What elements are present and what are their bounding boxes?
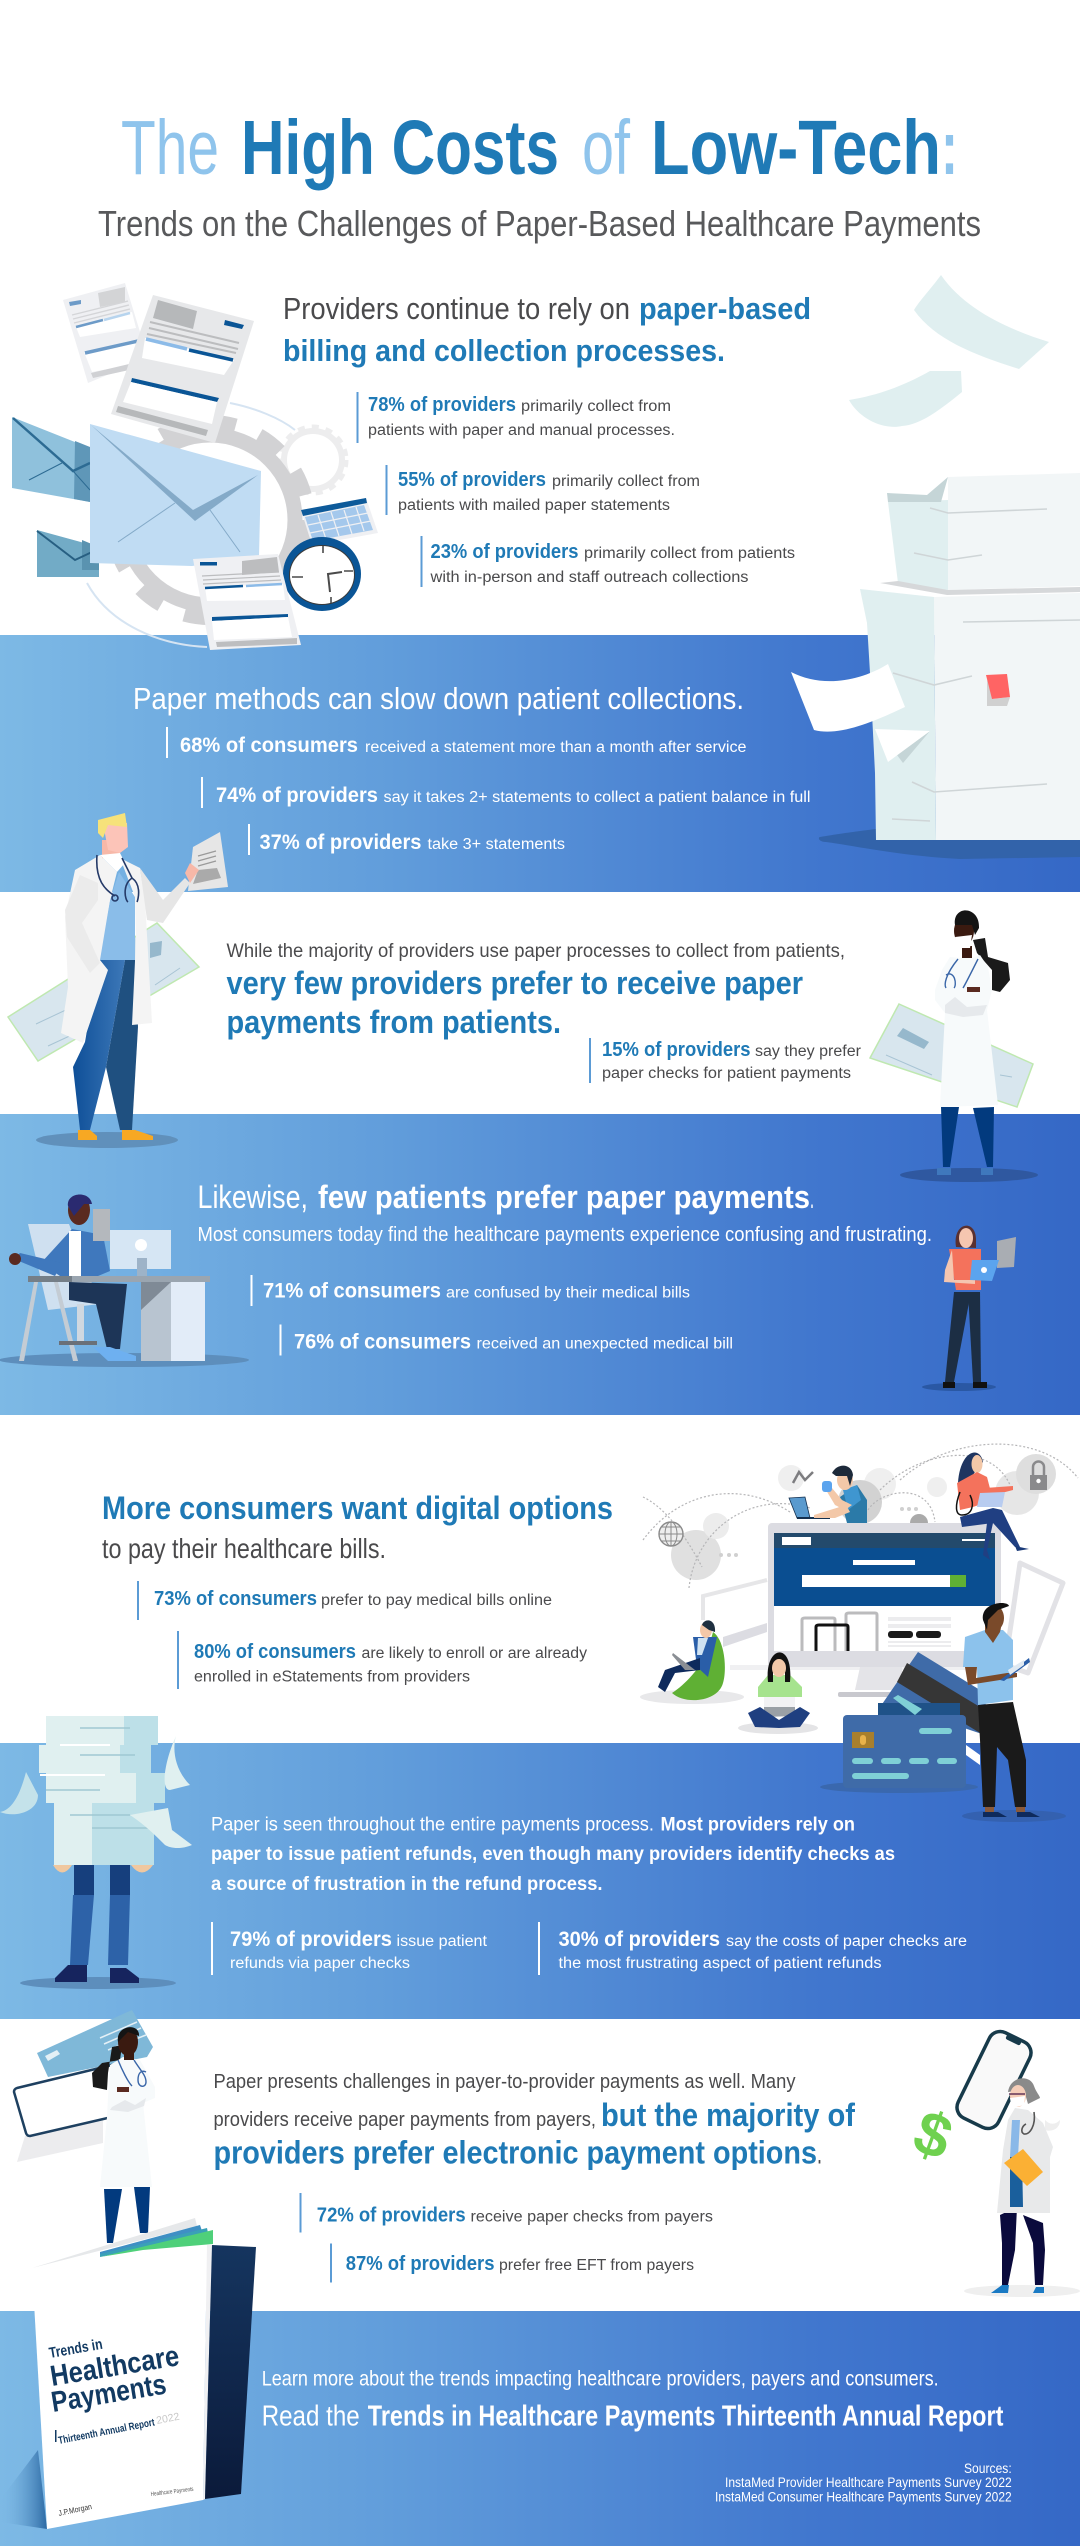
flying papers bbox=[849, 275, 1049, 427]
body text: but the majority of bbox=[601, 2097, 855, 2133]
illustration: digital payments scene bbox=[640, 1444, 1078, 1822]
stat: 72% of providers bbox=[300, 2193, 713, 2232]
blue band: paper methods bbox=[0, 635, 1080, 892]
stat: 55% of providers: 55% of providers bbox=[398, 469, 546, 491]
body text: a source of frustration in the refund process. bbox=[211, 1873, 602, 1895]
stat: 72% of providers: 72% of providers bbox=[317, 2204, 466, 2226]
stat: 23% of providers: 23% of providers bbox=[430, 541, 578, 563]
stat: 78% of providers: primarily collect from bbox=[521, 398, 671, 415]
heading: more consumers bbox=[102, 1490, 613, 1564]
stat: 72% of providers: receive paper checks from payers bbox=[470, 2208, 713, 2226]
blue band: learn more bbox=[0, 2311, 1080, 2546]
section: consumers want digital options bbox=[102, 1490, 613, 1689]
stat: 78% of providers: patients with paper and manual processes. bbox=[368, 422, 675, 439]
stat: 68% of consumers: received a statement more than a month after service bbox=[365, 739, 746, 756]
illustration: doctor with card and laptop bbox=[14, 2010, 155, 2243]
icon: padlock bbox=[1030, 1462, 1047, 1490]
icon: calendar bbox=[301, 498, 378, 545]
stat: 76% of consumers bbox=[280, 1324, 733, 1356]
section: few patients prefer paper: . bbox=[810, 1179, 814, 1215]
title: The bbox=[121, 105, 219, 191]
section: few providers prefer paper bbox=[226, 940, 861, 1083]
body text: providers receive paper payments from payers, bbox=[214, 2109, 596, 2131]
stat: 68% of consumers bbox=[166, 727, 746, 758]
stat: 71% of consumers bbox=[250, 1275, 690, 1306]
stat: 15% of providers: say they prefer bbox=[755, 1043, 861, 1060]
section: providers rely on paper bbox=[283, 291, 811, 587]
stat: 73% of consumers bbox=[137, 1581, 552, 1620]
body text: Paper presents challenges in payer-to-provider payments as well. Many bbox=[214, 2071, 796, 2093]
sources: Sources: bbox=[964, 2461, 1012, 2476]
sources bbox=[715, 2461, 1012, 2504]
icon: small envelope bbox=[37, 530, 99, 577]
stat: 30% of providers: the most frustrating aspect of patient refunds bbox=[558, 1955, 882, 1972]
book cover title bbox=[48, 2336, 181, 2447]
illustration: woman with laptop bbox=[922, 1226, 1016, 1391]
heading: very few providers: payments from patients. bbox=[226, 1004, 561, 1040]
stat: 55% of providers: primarily collect from bbox=[552, 473, 700, 490]
stat: 30% of providers: 30% of providers bbox=[558, 1928, 720, 1951]
sources: InstaMed Consumer Healthcare Payments Survey 2022 bbox=[715, 2490, 1012, 2504]
stat: 15% of providers: paper checks for patient payments bbox=[602, 1065, 851, 1082]
person: woman cross-legged bbox=[738, 1652, 818, 1734]
illustration: stack of paper bbox=[791, 275, 1080, 859]
icon: main envelope bbox=[90, 424, 261, 566]
icon: dots bbox=[719, 1507, 918, 1557]
heading: paper methods: Paper methods can slow down patient collections. bbox=[133, 681, 744, 716]
heading: likewise: few patients prefer paper payments bbox=[318, 1179, 810, 1215]
learn more text: Learn more about the trends impacting healthcare providers, payers and consumers. bbox=[262, 2368, 939, 2390]
icon: dollar sign: $ bbox=[905, 2097, 961, 2174]
stat: 78% of providers bbox=[356, 392, 675, 443]
heading: more consumers: to pay their healthcare bills. bbox=[102, 1533, 386, 1564]
body text: paper to issue patient refunds, even though many providers identify checks as bbox=[211, 1843, 895, 1865]
document left bbox=[63, 283, 148, 383]
book cover title: Trends in bbox=[48, 2336, 104, 2362]
person: woman sitting on monitor bbox=[956, 1452, 1029, 1560]
stat: 80% of consumers bbox=[177, 1631, 587, 1689]
body text bbox=[211, 1814, 895, 1895]
stat: 68% of consumers: 68% of consumers bbox=[180, 734, 358, 757]
stat: 15% of providers: 15% of providers bbox=[602, 1039, 750, 1061]
stat: 79% of providers bbox=[211, 1922, 488, 1975]
icon: clock bbox=[283, 537, 361, 611]
heading: very few providers: very few providers prefer to receive paper bbox=[226, 965, 803, 1001]
heading: likewise: Likewise, bbox=[198, 1179, 308, 1215]
stat: 15% of providers bbox=[589, 1038, 861, 1083]
section: payer-to-provider payments bbox=[214, 2071, 855, 2282]
book cover title: Payments bbox=[49, 2369, 169, 2419]
blue band: few patients prefer paper bbox=[0, 1114, 1080, 1415]
body text: Most providers rely on bbox=[660, 1814, 855, 1836]
stat: 80% of consumers: enrolled in eStatements from providers bbox=[194, 1668, 470, 1686]
section: learn more call to action bbox=[262, 2368, 1012, 2504]
blue band: paper throughout process bbox=[0, 1743, 1080, 2019]
stat: 87% of providers bbox=[330, 2244, 694, 2282]
stat: 73% of consumers: 73% of consumers bbox=[154, 1588, 317, 1610]
laptop outline bbox=[703, 1580, 767, 1647]
icon: phone bbox=[953, 2027, 1035, 2133]
stat: 74% of providers: say it takes 2+ statements to collect a patient balance in full bbox=[384, 789, 810, 806]
stat: 55% of providers bbox=[386, 465, 700, 515]
stat: 78% of providers: 78% of providers bbox=[368, 394, 516, 416]
stat: 71% of consumers: are confused by their medical bills bbox=[446, 1284, 690, 1302]
stat: 79% of providers: issue patient bbox=[396, 1933, 488, 1950]
stat: 80% of consumers: 80% of consumers bbox=[194, 1641, 356, 1663]
body text: . bbox=[817, 2134, 822, 2170]
illustration: male doctor holding paper bbox=[8, 813, 228, 1148]
title: Low-Tech bbox=[651, 105, 941, 191]
illustration: doctor with phone and dollar sign bbox=[905, 2027, 1080, 2297]
title bbox=[121, 105, 958, 191]
title: High Costs bbox=[241, 105, 559, 191]
person: man with laptop on monitor bbox=[789, 1466, 867, 1523]
icon: small gear bbox=[280, 427, 346, 493]
heading: paper-based billing: paper-based bbox=[639, 291, 811, 326]
body text: Paper is seen throughout the entire payments process. bbox=[211, 1814, 654, 1836]
title: of bbox=[582, 105, 630, 191]
stat: 55% of providers: patients with mailed paper statements bbox=[398, 497, 670, 514]
stat: 23% of providers bbox=[420, 536, 795, 587]
stat: 74% of providers bbox=[201, 777, 810, 808]
illustration: female doctor with check bbox=[870, 910, 1038, 1182]
report link text: Read the bbox=[262, 2400, 360, 2432]
icon: large gear bbox=[112, 422, 308, 618]
icon: globe bbox=[659, 1522, 683, 1546]
title: : bbox=[941, 105, 958, 191]
icon: credit cards bbox=[820, 1652, 1000, 1793]
body text bbox=[214, 2071, 855, 2170]
section: paper methods slow collections bbox=[133, 681, 810, 855]
stat: 80% of consumers: are likely to enroll or are already bbox=[362, 1645, 587, 1662]
heading: paper-based billing: Providers continue to rely on bbox=[283, 291, 630, 326]
stat: 76% of consumers: 76% of consumers bbox=[294, 1330, 471, 1354]
intro text: While the majority of providers use paper processes to collect from patients, bbox=[226, 940, 845, 962]
stat: 79% of providers: refunds via paper checks bbox=[230, 1955, 410, 1972]
heading: paper-based billing: billing and collection processes. bbox=[283, 333, 725, 368]
stat: 87% of providers: prefer free EFT from payers bbox=[499, 2257, 694, 2274]
phone outline bbox=[1005, 1563, 1063, 1673]
illustration: man at desk bbox=[0, 1194, 249, 1367]
computer monitor bbox=[730, 1523, 1001, 1697]
stat: 37% of providers: take 3+ statements bbox=[428, 836, 565, 853]
stat: 76% of consumers: received an unexpected medical bill bbox=[476, 1336, 733, 1352]
sources: InstaMed Provider Healthcare Payments Survey 2022 bbox=[725, 2475, 1012, 2490]
heading: very few providers bbox=[226, 965, 803, 1040]
illustration: paper, envelopes, gear and clock bbox=[12, 283, 378, 650]
icon: back envelope bbox=[12, 417, 90, 502]
sticky note bbox=[986, 674, 1010, 706]
illustration: report book: J.P.Morgan bbox=[58, 2502, 93, 2518]
stat: 23% of providers: primarily collect from patients bbox=[584, 545, 795, 562]
illustration: report book bbox=[0, 2218, 256, 2529]
stat: 37% of providers bbox=[248, 824, 565, 855]
section: paper throughout the process bbox=[211, 1814, 967, 1975]
icon: chart glyph bbox=[793, 1472, 813, 1483]
stat: 30% of providers: say the costs of paper checks are bbox=[726, 1933, 967, 1950]
heading: paper-based billing bbox=[283, 291, 811, 368]
body text: providers prefer electronic payment options bbox=[214, 2134, 817, 2170]
book cover title: Healthcare bbox=[48, 2340, 181, 2393]
stat: 71% of consumers: 71% of consumers bbox=[263, 1280, 441, 1302]
stat: 73% of consumers: prefer to pay medical bills online bbox=[321, 1592, 552, 1609]
person: woman on beanbag bbox=[640, 1620, 744, 1704]
document centre bbox=[111, 295, 254, 443]
stat: 37% of providers: 37% of providers bbox=[260, 831, 422, 854]
illustration: person carrying paper stack bbox=[0, 1716, 192, 1989]
person: man with phone bbox=[962, 1603, 1066, 1822]
stat: 23% of providers: with in-person and staff outreach collections bbox=[429, 569, 749, 586]
document front bbox=[193, 554, 301, 650]
stat: 30% of providers bbox=[538, 1922, 967, 1975]
illustration: report book: 2022 bbox=[155, 2411, 181, 2427]
subheading: Most consumers today find the healthcare payments experience confusing and frustrating. bbox=[198, 1224, 932, 1246]
stat: 79% of providers: 79% of providers bbox=[230, 1928, 392, 1951]
stat: 87% of providers: 87% of providers bbox=[346, 2253, 494, 2275]
illustration: report book: Healthcare Payments bbox=[151, 2487, 194, 2498]
section: few patients prefer paper bbox=[198, 1179, 932, 1356]
stat: 74% of providers: 74% of providers bbox=[216, 784, 378, 807]
heading: more consumers: More consumers want digital options bbox=[102, 1490, 613, 1526]
book cover title: Thirteenth Annual Report bbox=[57, 2416, 156, 2447]
